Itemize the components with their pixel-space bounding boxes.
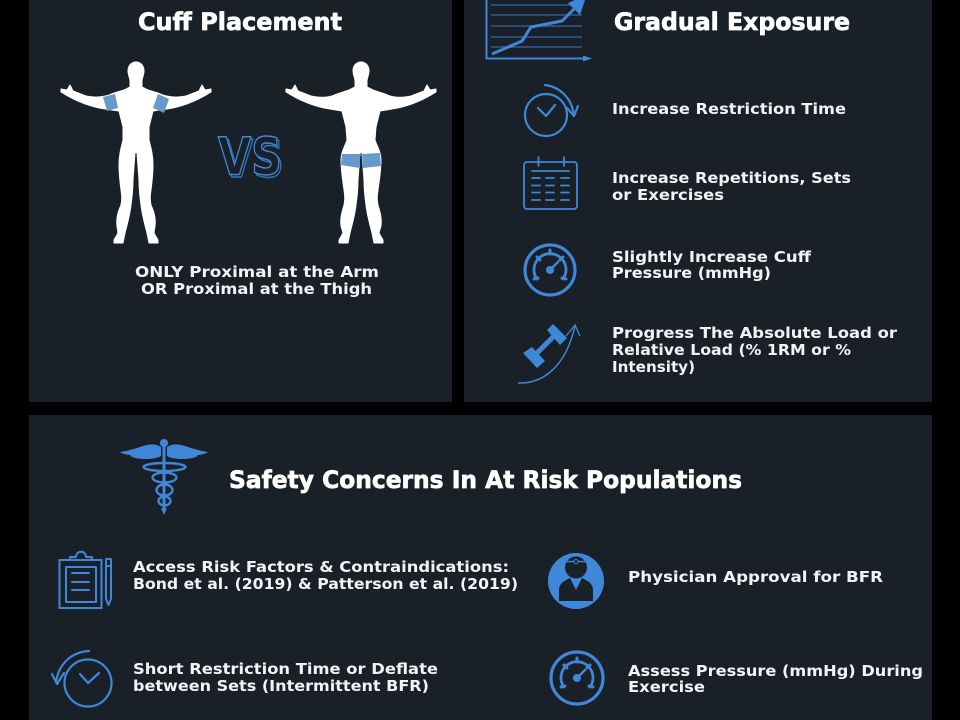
panel: gradual exposure (464, 0, 932, 402)
thigh cuff: left (341, 154, 360, 168)
figure: thigh cuff placement (286, 62, 436, 243)
icon: clock with backward arrow (52, 651, 112, 706)
text: increase repetitions: Increase Repetitions, Sets (612, 169, 851, 187)
text: short restriction time: between Sets (Intermittent BFR) (133, 677, 429, 695)
figure: arm cuff placement (61, 62, 211, 243)
text: increase repetitions (612, 169, 851, 204)
text: assess pressure: Exercise (628, 678, 705, 696)
text: progress load: Intensity) (612, 358, 695, 376)
heading: gradual exposure: Gradual Exposure (614, 8, 850, 36)
icon: pressure gauge (525, 245, 575, 295)
text: cuff pressure (612, 248, 811, 282)
icon: physician (548, 553, 604, 609)
heading: cuff placement: Cuff Placement (138, 8, 342, 36)
icon: rising line chart (486, 0, 592, 62)
text: cuff pressure: Slightly Increase Cuff (612, 248, 811, 266)
heading: safety concerns: Safety Concerns In At Risk Populations (229, 466, 742, 494)
thigh cuff: right (362, 153, 381, 168)
text: short restriction time (133, 660, 438, 695)
text: progress load (612, 324, 897, 376)
panel: safety concerns (29, 415, 932, 720)
arm cuff: right (153, 94, 169, 113)
icon: calendar (524, 157, 577, 209)
caption: cuff placement: OR Proximal at the Thigh (141, 280, 372, 298)
text: progress load: Relative Load (% 1RM or % (612, 341, 851, 359)
text: assess risk factors: Access Risk Factors & Contraindications: (133, 558, 509, 576)
vs emblem: VS (220, 130, 284, 190)
text: cuff pressure: Pressure (mmHg) (612, 264, 771, 282)
text: increase restriction time: Increase Restriction Time (612, 100, 846, 118)
text: physician approval: Physician Approval for BFR (628, 568, 883, 586)
icon: dumbbell with rising arrow (518, 324, 580, 383)
icon: caduceus (120, 439, 208, 515)
vs emblem: VS (218, 128, 282, 188)
text: assess pressure: Assess Pressure (mmHg) During (628, 662, 923, 680)
icon: pressure gauge (551, 652, 603, 704)
arm cuff: left (103, 94, 118, 111)
text: assess risk factors (133, 558, 518, 593)
caption: cuff placement (135, 263, 379, 298)
panel: cuff placement (29, 0, 452, 402)
text: increase repetitions: or Exercises (612, 186, 724, 204)
icon: clock with forward arrow (525, 85, 578, 136)
caption: cuff placement: ONLY Proximal at the Arm (135, 263, 379, 281)
text: assess pressure (628, 662, 923, 696)
text: progress load: Progress The Absolute Load or (612, 324, 897, 342)
icon: clipboard and pencil (60, 552, 111, 608)
text: short restriction time: Short Restriction Time or Deflate (133, 660, 438, 678)
text: assess risk factors: Bond et al. (2019) & Patterson et al. (2019) (133, 575, 518, 593)
